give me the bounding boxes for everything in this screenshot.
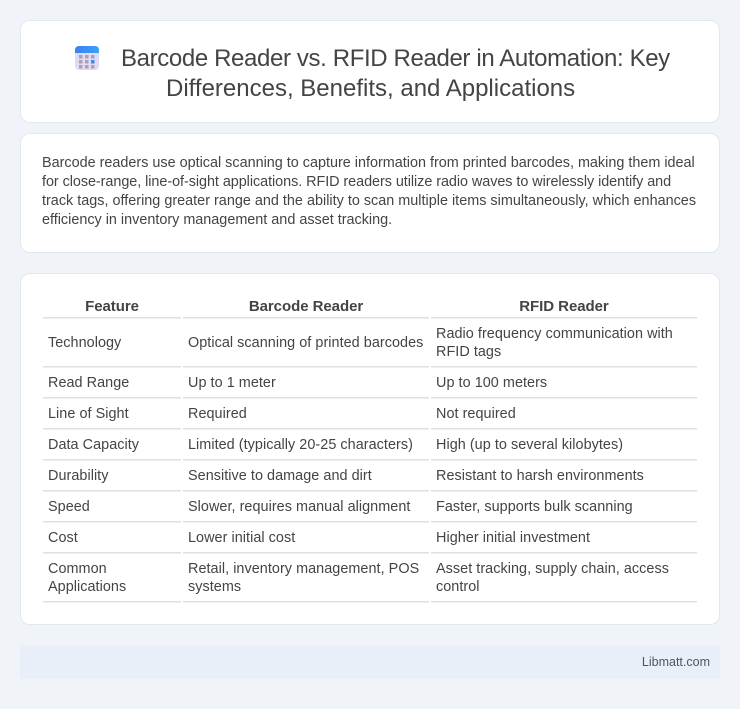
row: cost: Higher initial investment (436, 530, 590, 546)
row: cost: Cost (48, 530, 78, 546)
panel: intro (20, 133, 720, 253)
table header: feature: Feature (85, 298, 139, 315)
row: read range (48, 375, 547, 391)
row: line of sight: Required (188, 406, 247, 422)
intro text: for close-range, line-of-sight applications. RFID readers utilize radio waves to wirelessly identify and (42, 174, 671, 190)
intro text: Barcode readers use optical scanning to capture information from printed barcodes, making them ideal (42, 155, 695, 171)
table header: barcode reader: Barcode Reader (249, 298, 363, 315)
row: read range: Read Range (48, 375, 129, 391)
footer credit: Libmatt.com (642, 655, 710, 669)
row: common applications: systems (188, 579, 241, 595)
row: technology (48, 326, 673, 360)
row: technology: Technology (48, 335, 121, 351)
row: data capacity: High (up to several kilobytes) (436, 437, 623, 453)
row: durability: Resistant to harsh environments (436, 468, 644, 484)
intro text: efficiency in inventory management and asset tracking. (42, 212, 392, 228)
row: line of sight: Line of Sight (48, 406, 129, 422)
footer (20, 645, 720, 679)
row: read range: Up to 1 meter (188, 375, 276, 391)
row: common applications: Asset tracking, supply chain, access (436, 561, 669, 577)
panel: comparison table (20, 273, 720, 625)
row: data capacity (48, 437, 623, 453)
row: durability: Durability (48, 468, 108, 484)
row: speed: Faster, supports bulk scanning (436, 499, 633, 515)
row: durability: Sensitive to damage and dirt (188, 468, 372, 484)
row: technology: Radio frequency communication with (436, 326, 673, 342)
row: common applications: Retail, inventory management, POS (188, 561, 419, 577)
row: cost (48, 530, 590, 546)
row: data capacity: Limited (typically 20-25 characters) (188, 437, 413, 453)
panel: header (20, 20, 720, 123)
row: line of sight: Not required (436, 406, 516, 422)
row: read range: Up to 100 meters (436, 375, 547, 391)
row: speed (48, 499, 633, 515)
intro text: track tags, offering greater range and the ability to scan multiple items simultaneously, which enhances (42, 193, 696, 209)
row: speed: Slower, requires manual alignment (188, 499, 410, 515)
title (121, 45, 670, 102)
intro text (42, 155, 696, 228)
row: common applications: Common (48, 561, 107, 577)
row: common applications (48, 561, 669, 595)
row: common applications: control (436, 579, 480, 595)
row: cost: Lower initial cost (188, 530, 295, 546)
title: Differences, Benefits, and Applications (166, 75, 575, 102)
row: durability (48, 468, 644, 484)
row: data capacity: Data Capacity (48, 437, 139, 453)
row: line of sight (48, 406, 516, 422)
row: technology: RFID tags (436, 344, 501, 360)
table header: RFID reader: RFID Reader (519, 298, 609, 315)
row: common applications: Applications (48, 579, 126, 595)
row: technology: Optical scanning of printed barcodes (188, 335, 423, 351)
row: speed: Speed (48, 499, 90, 515)
icon: calendar grid (75, 46, 99, 70)
title: Barcode Reader vs. RFID Reader in Automation: Key (121, 45, 670, 72)
